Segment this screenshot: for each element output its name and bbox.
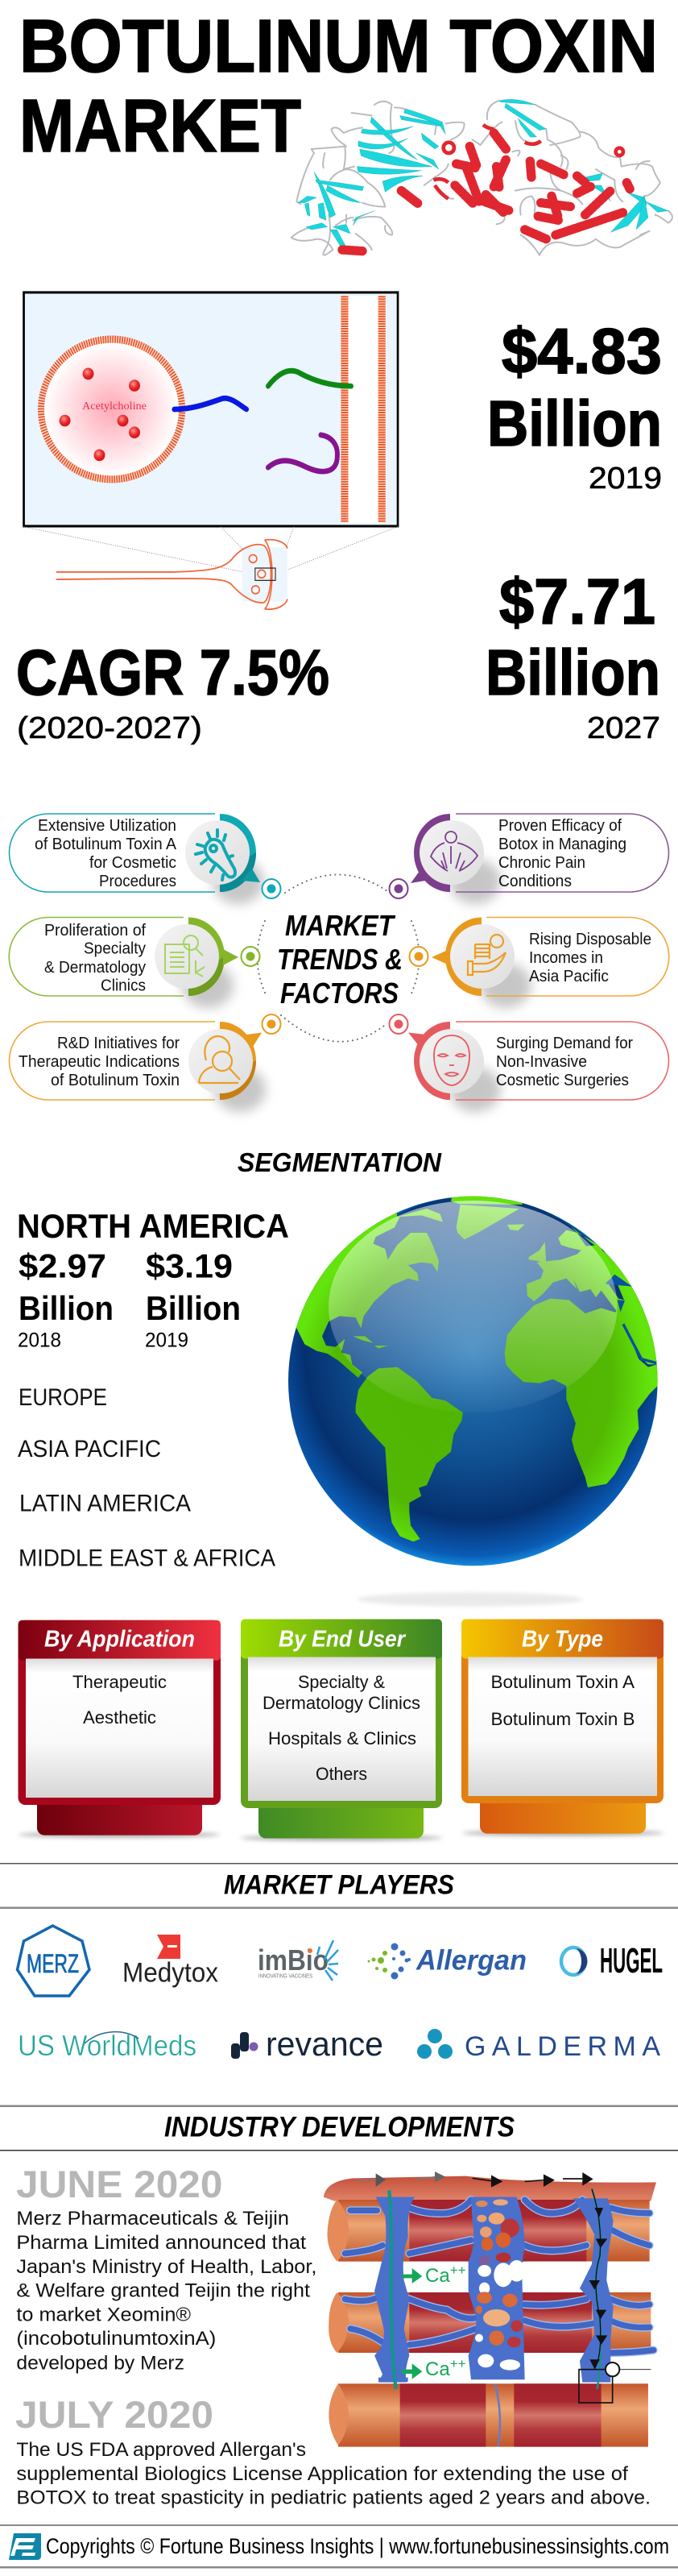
stat: 2027 market size: $7.71 (499, 566, 655, 637)
development: June 2020: Japan's Ministry of Health, Labor, (16, 2256, 316, 2278)
logo: Galderma: GALDERMA (465, 2031, 660, 2062)
stat: 2019 market size: $4.83 (502, 315, 662, 387)
purple toxin chain (268, 435, 337, 471)
market players heading: MARKET PLAYERS (224, 1870, 454, 1901)
logo: Allergan: Allergan (415, 1945, 527, 1976)
development: June 2020: & Welfare granted Teijin the right (16, 2280, 310, 2301)
market player logos (18, 1926, 663, 2063)
factor: R&D initiatives: R&D Initiatives for (57, 1035, 180, 1052)
logo: Revance: revance (266, 2025, 383, 2063)
other regions: LATIN AMERICA (19, 1491, 191, 1517)
center heading: FACTORS (280, 977, 399, 1010)
factor: specialty clinics (9, 917, 260, 1008)
North America 2018: 2018 (18, 1329, 61, 1352)
North America 2018: Billion (19, 1289, 114, 1327)
North America 2018 (18, 1247, 114, 1352)
muscle fibre illustration: Ca (425, 2265, 450, 2287)
stat: 2027 market size: 2027 (587, 711, 660, 745)
title (19, 4, 658, 168)
North America heading: NORTH AMERICA (17, 1207, 289, 1245)
stat: CAGR: CAGR 7.5% (16, 637, 329, 708)
factor: cosmetic procedures: for Cosmetic (89, 854, 176, 872)
factor: specialty clinics: & Dermatology (44, 959, 146, 977)
North America 2019 (145, 1247, 241, 1352)
development: July 2020: BOTOX to treat spasticity in pediatric patients aged 2 years and above. (16, 2487, 651, 2509)
other regions: ASIA PACIFIC (18, 1436, 161, 1462)
factor: chronic pain: Conditions (498, 873, 572, 890)
logo: Medytox (122, 1935, 218, 1989)
segment card: by end user: Dermatology Clinics (263, 1693, 420, 1713)
stat: 2027 market size (486, 566, 660, 745)
factor: specialty clinics: Proliferation of (44, 922, 146, 940)
logo: imBio: imBio (258, 1943, 329, 1977)
factor: disposable incomes: Asia Pacific (529, 968, 609, 985)
segment card: by application (18, 1620, 221, 1837)
development: July 2020: JULY 2020 (15, 2393, 213, 2436)
development: July 2020: The US FDA approved Allergan's (16, 2439, 306, 2461)
zoom box (24, 292, 398, 526)
stat: 2019 market size (487, 315, 662, 496)
factor: chronic pain (390, 814, 668, 904)
segment card: by end user: By End User (279, 1626, 407, 1652)
factor: cosmetic surgeries: Non-Invasive (496, 1053, 587, 1071)
logo: Merz: MERZ (27, 1949, 79, 1978)
segment card: by end user (241, 1620, 442, 1840)
title: MARKET (19, 84, 301, 168)
factor: R&D initiatives: of Botulinum Toxin (51, 1072, 180, 1089)
icon: Fortune Business Insights logo (9, 2533, 41, 2560)
stat: 2019 market size: 2019 (589, 462, 662, 496)
segment card: by application: By Application (44, 1626, 195, 1652)
stat: CAGR (16, 637, 329, 745)
green toxin chain (268, 371, 351, 386)
development: June 2020: (incobotulinumtoxinA) (16, 2328, 216, 2350)
segmentation heading: SEGMENTATION (238, 1147, 442, 1177)
logo: Merz (18, 1926, 89, 1996)
segment card: by type: Botulinum Toxin B (491, 1709, 635, 1729)
factor: cosmetic surgeries: Surging Demand for (496, 1035, 633, 1052)
segment card: by application: Therapeutic (72, 1672, 167, 1692)
market trends and factors panel (9, 814, 669, 1112)
center heading: TRENDS & (277, 943, 403, 976)
factor: chronic pain: Botox in Managing (498, 836, 626, 853)
factor: R&D initiatives: Therapeutic Indications (19, 1053, 180, 1071)
development: June 2020: to market Xeomin® (16, 2304, 191, 2326)
center heading (277, 909, 403, 1010)
development: June 2020: JUNE 2020 (16, 2163, 222, 2205)
factor: specialty clinics: Clinics (101, 977, 146, 994)
development: June 2020: developed by Merz (16, 2353, 184, 2375)
development: June 2020: Merz Pharmaceuticals & Teijin (16, 2208, 289, 2230)
development: July 2020 (15, 2393, 651, 2509)
segment card: by type: Botulinum Toxin A (491, 1672, 635, 1692)
factor: cosmetic procedures: Procedures (99, 873, 176, 890)
connector dots (258, 874, 419, 1042)
segment card: by type: By Type (522, 1626, 603, 1652)
factor: disposable incomes: Incomes in (529, 949, 603, 967)
North America 2019: 2019 (145, 1329, 188, 1352)
development: June 2020 (16, 2163, 316, 2375)
factor: R&D initiatives (9, 1014, 280, 1112)
muscle fibre illustration (324, 2172, 656, 2447)
other regions (18, 1384, 275, 1571)
factor: chronic pain: Chronic Pain (498, 854, 585, 872)
blue toxin chain (174, 398, 246, 409)
segment card: by type (461, 1620, 664, 1836)
factor: disposable incomes: Rising Disposable (529, 931, 651, 948)
muscle fibre illustration: Ca (425, 2358, 450, 2380)
factor: cosmetic procedures: of Botulinum Toxin A (35, 836, 177, 853)
segment card: by application: Aesthetic (83, 1707, 156, 1728)
stat: 2027 market size: Billion (486, 637, 660, 708)
factor: specialty clinics: Specialty (84, 940, 146, 957)
logo: imBio: INNOVATING VACCINES (258, 1974, 312, 1979)
industry developments heading: INDUSTRY DEVELOPMENTS (164, 2111, 515, 2143)
North America 2018: $2.97 (19, 1247, 106, 1285)
development: June 2020: Pharma Limited announced that (16, 2232, 306, 2254)
nerve terminal (24, 527, 398, 609)
factor: cosmetic procedures: Extensive Utilization (38, 817, 176, 835)
acetylcholine label: Acetylcholine (82, 400, 147, 412)
protein structure illustration (291, 99, 672, 255)
muscle fibre illustration: ++ (450, 2263, 466, 2278)
footer (9, 2533, 669, 2560)
segment card: by end user: Hospitals & Clinics (268, 1728, 416, 1748)
muscle fibre illustration: ++ (450, 2356, 466, 2371)
factor: cosmetic surgeries (390, 1014, 668, 1112)
regional data (17, 1207, 289, 1571)
globe (279, 1190, 663, 1607)
factor: disposable incomes (409, 917, 669, 1008)
logo: US WorldMeds: US WorldMeds (18, 2029, 196, 2062)
synapse diagram (24, 292, 398, 609)
North America 2019: Billion (146, 1289, 241, 1327)
logo: Hugel (561, 1941, 663, 1981)
segment card: by end user: Specialty & (298, 1672, 385, 1692)
development: July 2020: supplemental Biologics License Application for extending the use of (16, 2463, 628, 2485)
segment card: by end user: Others (316, 1764, 367, 1784)
logo: Medytox: Medytox (122, 1958, 218, 1989)
logo: Allergan (367, 1943, 527, 1979)
North America 2019: $3.19 (146, 1247, 233, 1285)
factor: cosmetic procedures (9, 814, 280, 904)
center heading: MARKET (285, 909, 396, 942)
acetylcholine vesicle (41, 339, 182, 479)
other regions: EUROPE (19, 1384, 107, 1411)
factor: cosmetic surgeries: Cosmetic Surgeries (496, 1072, 629, 1089)
factor: chronic pain: Proven Efficacy of (498, 817, 622, 835)
stat: CAGR: (2020-2027) (17, 711, 202, 745)
other regions: MIDDLE EAST & AFRICA (19, 1545, 275, 1571)
